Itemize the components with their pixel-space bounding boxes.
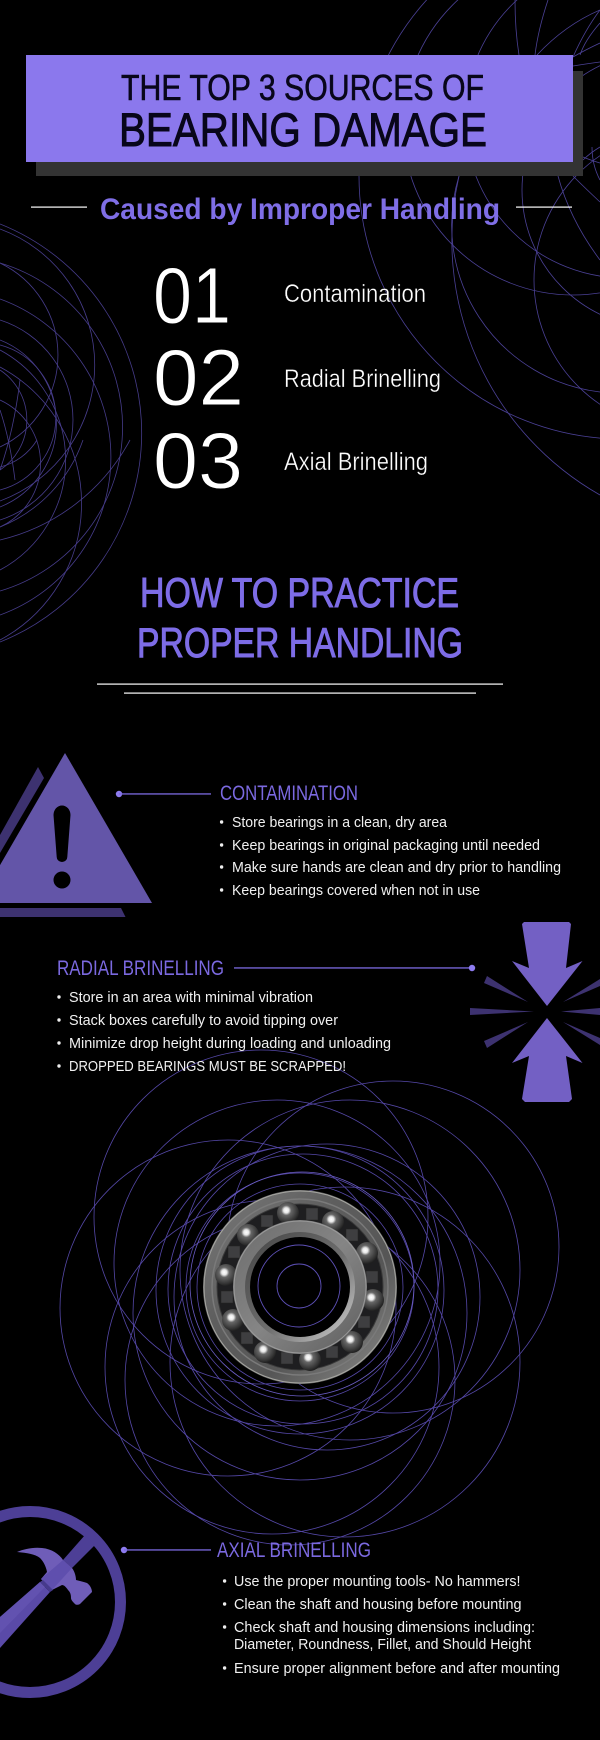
title line 2: BEARING DAMAGE [119,103,487,156]
label contamination: Contamination [284,280,426,308]
section: radial brinelling [57,957,391,1075]
leader line: contamination [116,791,211,797]
bullets: Minimize drop height during loading and unloading [69,1036,391,1052]
heading: AXIAL BRINELLING [217,1539,371,1562]
bullets: Ensure proper alignment before and after mounting [234,1661,560,1677]
bullets: Stack boxes carefully to avoid tipping over [69,1013,338,1029]
title line 1: THE TOP 3 SOURCES OF [121,67,484,108]
label radial brinelling: Radial Brinelling [284,365,441,393]
icon: compression arrows [470,922,600,1102]
label axial brinelling: Axial Brinelling [284,448,428,476]
leader line: radial brinelling [234,965,475,971]
heading: how to practice proper handling: PROPER HANDLING [137,619,463,666]
bullets [223,1574,560,1677]
numbered list [153,251,441,505]
number 03: 03 [153,416,243,505]
number 01: 01 [153,251,231,340]
bullets: DROPPED BEARINGS MUST BE SCRAPPED! [69,1059,346,1075]
bullets: Make sure hands are clean and dry prior to handling [232,860,561,876]
bullets [220,815,561,899]
icon: warning triangle [0,753,152,917]
section: axial brinelling [217,1539,560,1677]
bullets [57,990,391,1075]
decorative circles: left [0,224,142,642]
title banner [26,55,573,162]
bullets: Check shaft and housing dimensions including: [234,1620,535,1636]
title banner shadow [36,71,583,176]
decorative circles: behind bearing [60,1050,559,1545]
section: contamination [220,782,561,899]
bullets: Keep bearings covered when not in use [232,883,480,899]
heading: RADIAL BRINELLING [57,957,224,980]
number 02: 02 [153,333,244,422]
heading: CONTAMINATION [220,782,358,805]
bullets: Use the proper mounting tools- No hammers! [234,1574,520,1590]
bullets: Clean the shaft and housing before mounting [234,1597,522,1613]
icon: no hammers [0,1512,120,1692]
decorative circles: top right [359,0,600,495]
leader line: axial brinelling [121,1547,211,1553]
inner circle lines [258,1245,340,1327]
bullets: Store in an area with minimal vibration [69,990,313,1006]
heading: how to practice proper handling: HOW TO PRACTICE [140,569,459,616]
bullets: Store bearings in a clean, dry area [232,815,448,831]
subtitle text: Caused by Improper Handling [100,193,500,226]
bearing photo illustration [203,1190,397,1384]
heading: how to practice proper handling [137,569,463,666]
cage pockets [221,1208,378,1364]
bullets: Diameter, Roundness, Fillet, and Should Height [234,1637,531,1653]
bullets: Keep bearings in original packaging until needed [232,838,540,854]
balls [215,1202,384,1371]
